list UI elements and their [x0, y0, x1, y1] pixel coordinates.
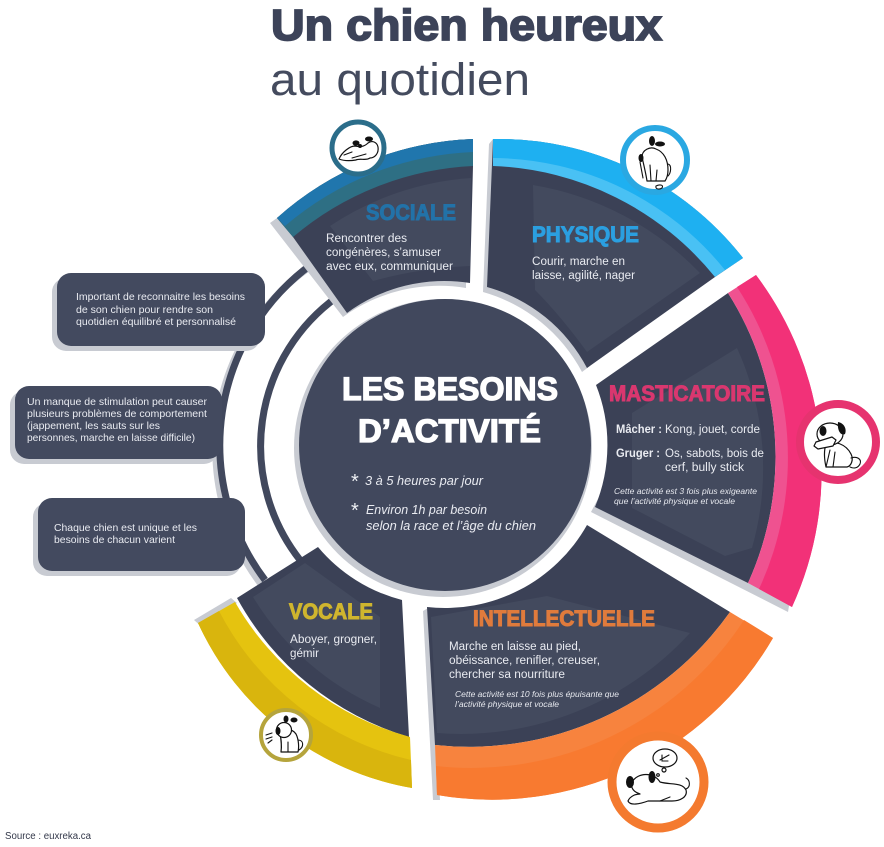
callout 3: besoins de chacun varient — [54, 535, 175, 546]
panel: masticatoire: Kong, jouet, corde — [665, 424, 760, 436]
callout 2: personnes, marche en laisse difficile) — [27, 433, 195, 444]
icon: physique dog — [623, 128, 687, 192]
panel: intellectuelle: Cette activité est 10 fois plus épuisante que — [455, 689, 619, 699]
center circle: 3 à 5 heures par jour — [365, 474, 484, 488]
panel: masticatoire: Mâcher : — [616, 424, 662, 436]
callout 3: Chaque chien est unique et les — [54, 523, 197, 534]
source: Source : euxreka.ca — [5, 831, 91, 842]
connector rings — [216, 264, 337, 584]
panel: vocale: VOCALE — [289, 599, 373, 624]
panel: intellectuelle: l’activité physique et vocale — [455, 699, 559, 709]
center circle — [294, 299, 592, 597]
title: au quotidien — [270, 54, 530, 105]
center circle: selon la race et l’âge du chien — [366, 519, 536, 533]
center circle: Environ 1h par besoin — [366, 503, 487, 517]
center circle: * — [351, 500, 359, 522]
callout 2: (jappement, les sauts sur les — [27, 421, 160, 432]
callout 1: de son chien pour rendre son — [76, 305, 213, 316]
panel: physique — [483, 139, 743, 372]
panel: masticatoire: que l’activité physique et vocale — [614, 496, 735, 506]
panel: sociale: SOCIALE — [366, 200, 456, 225]
callout 1: Important de reconnaitre les besoins — [76, 292, 245, 303]
callout 2: plusieurs problèmes de comportement — [27, 409, 207, 420]
panel: intellectuelle: Marche en laisse au pied, — [449, 641, 581, 653]
title — [270, 1, 663, 105]
panel: physique: PHYSIQUE — [532, 222, 639, 247]
panel: masticatoire: Cette activité est 3 fois plus exigeante — [614, 486, 757, 496]
title: Un chien heureux — [271, 1, 663, 50]
panel: sociale: avec eux, communiquer — [326, 261, 453, 273]
panel: intellectuelle: obéissance, renifler, creuser, — [449, 655, 600, 667]
center circle: LES BESOINS — [342, 371, 558, 407]
panel: sociale: congénères, s’amuser — [326, 247, 441, 259]
panel: masticatoire: MASTICATOIRE — [609, 381, 765, 406]
callout 2: Un manque de stimulation peut causer — [27, 397, 208, 408]
panel: masticatoire — [591, 275, 822, 612]
panel: vocale: Aboyer, grogner, — [290, 634, 377, 646]
panel: vocale — [194, 547, 412, 788]
callout 1: quotidien équilibré et personnalisé — [76, 317, 236, 328]
panel: vocale: gémir — [290, 648, 319, 660]
panel: intellectuelle: chercher sa nourriture — [449, 669, 565, 681]
panel: masticatoire: cerf, bully stick — [665, 462, 744, 474]
panel: physique: laisse, agilité, nager — [532, 270, 635, 282]
panel: sociale: Rencontrer des — [326, 233, 407, 245]
center circle: * — [351, 471, 359, 493]
callout 2 — [10, 386, 222, 464]
callout 3 — [33, 498, 245, 576]
panel: masticatoire: Os, sabots, bois de — [665, 448, 764, 460]
icon: sociale dog — [332, 122, 384, 174]
panel: intellectuelle: INTELLECTUELLE — [473, 606, 655, 631]
panel: physique: Courir, marche en — [532, 256, 625, 268]
icon: vocale dog — [261, 710, 311, 760]
icon: intellectuelle dog — [612, 736, 704, 828]
panel: masticatoire: Gruger : — [616, 448, 660, 460]
icon: masticatoire dog — [800, 404, 876, 480]
center circle: D’ACTIVITÉ — [358, 413, 541, 449]
panel: sociale — [270, 139, 473, 317]
panel: intellectuelle — [423, 525, 773, 800]
callout 1 — [52, 273, 265, 351]
